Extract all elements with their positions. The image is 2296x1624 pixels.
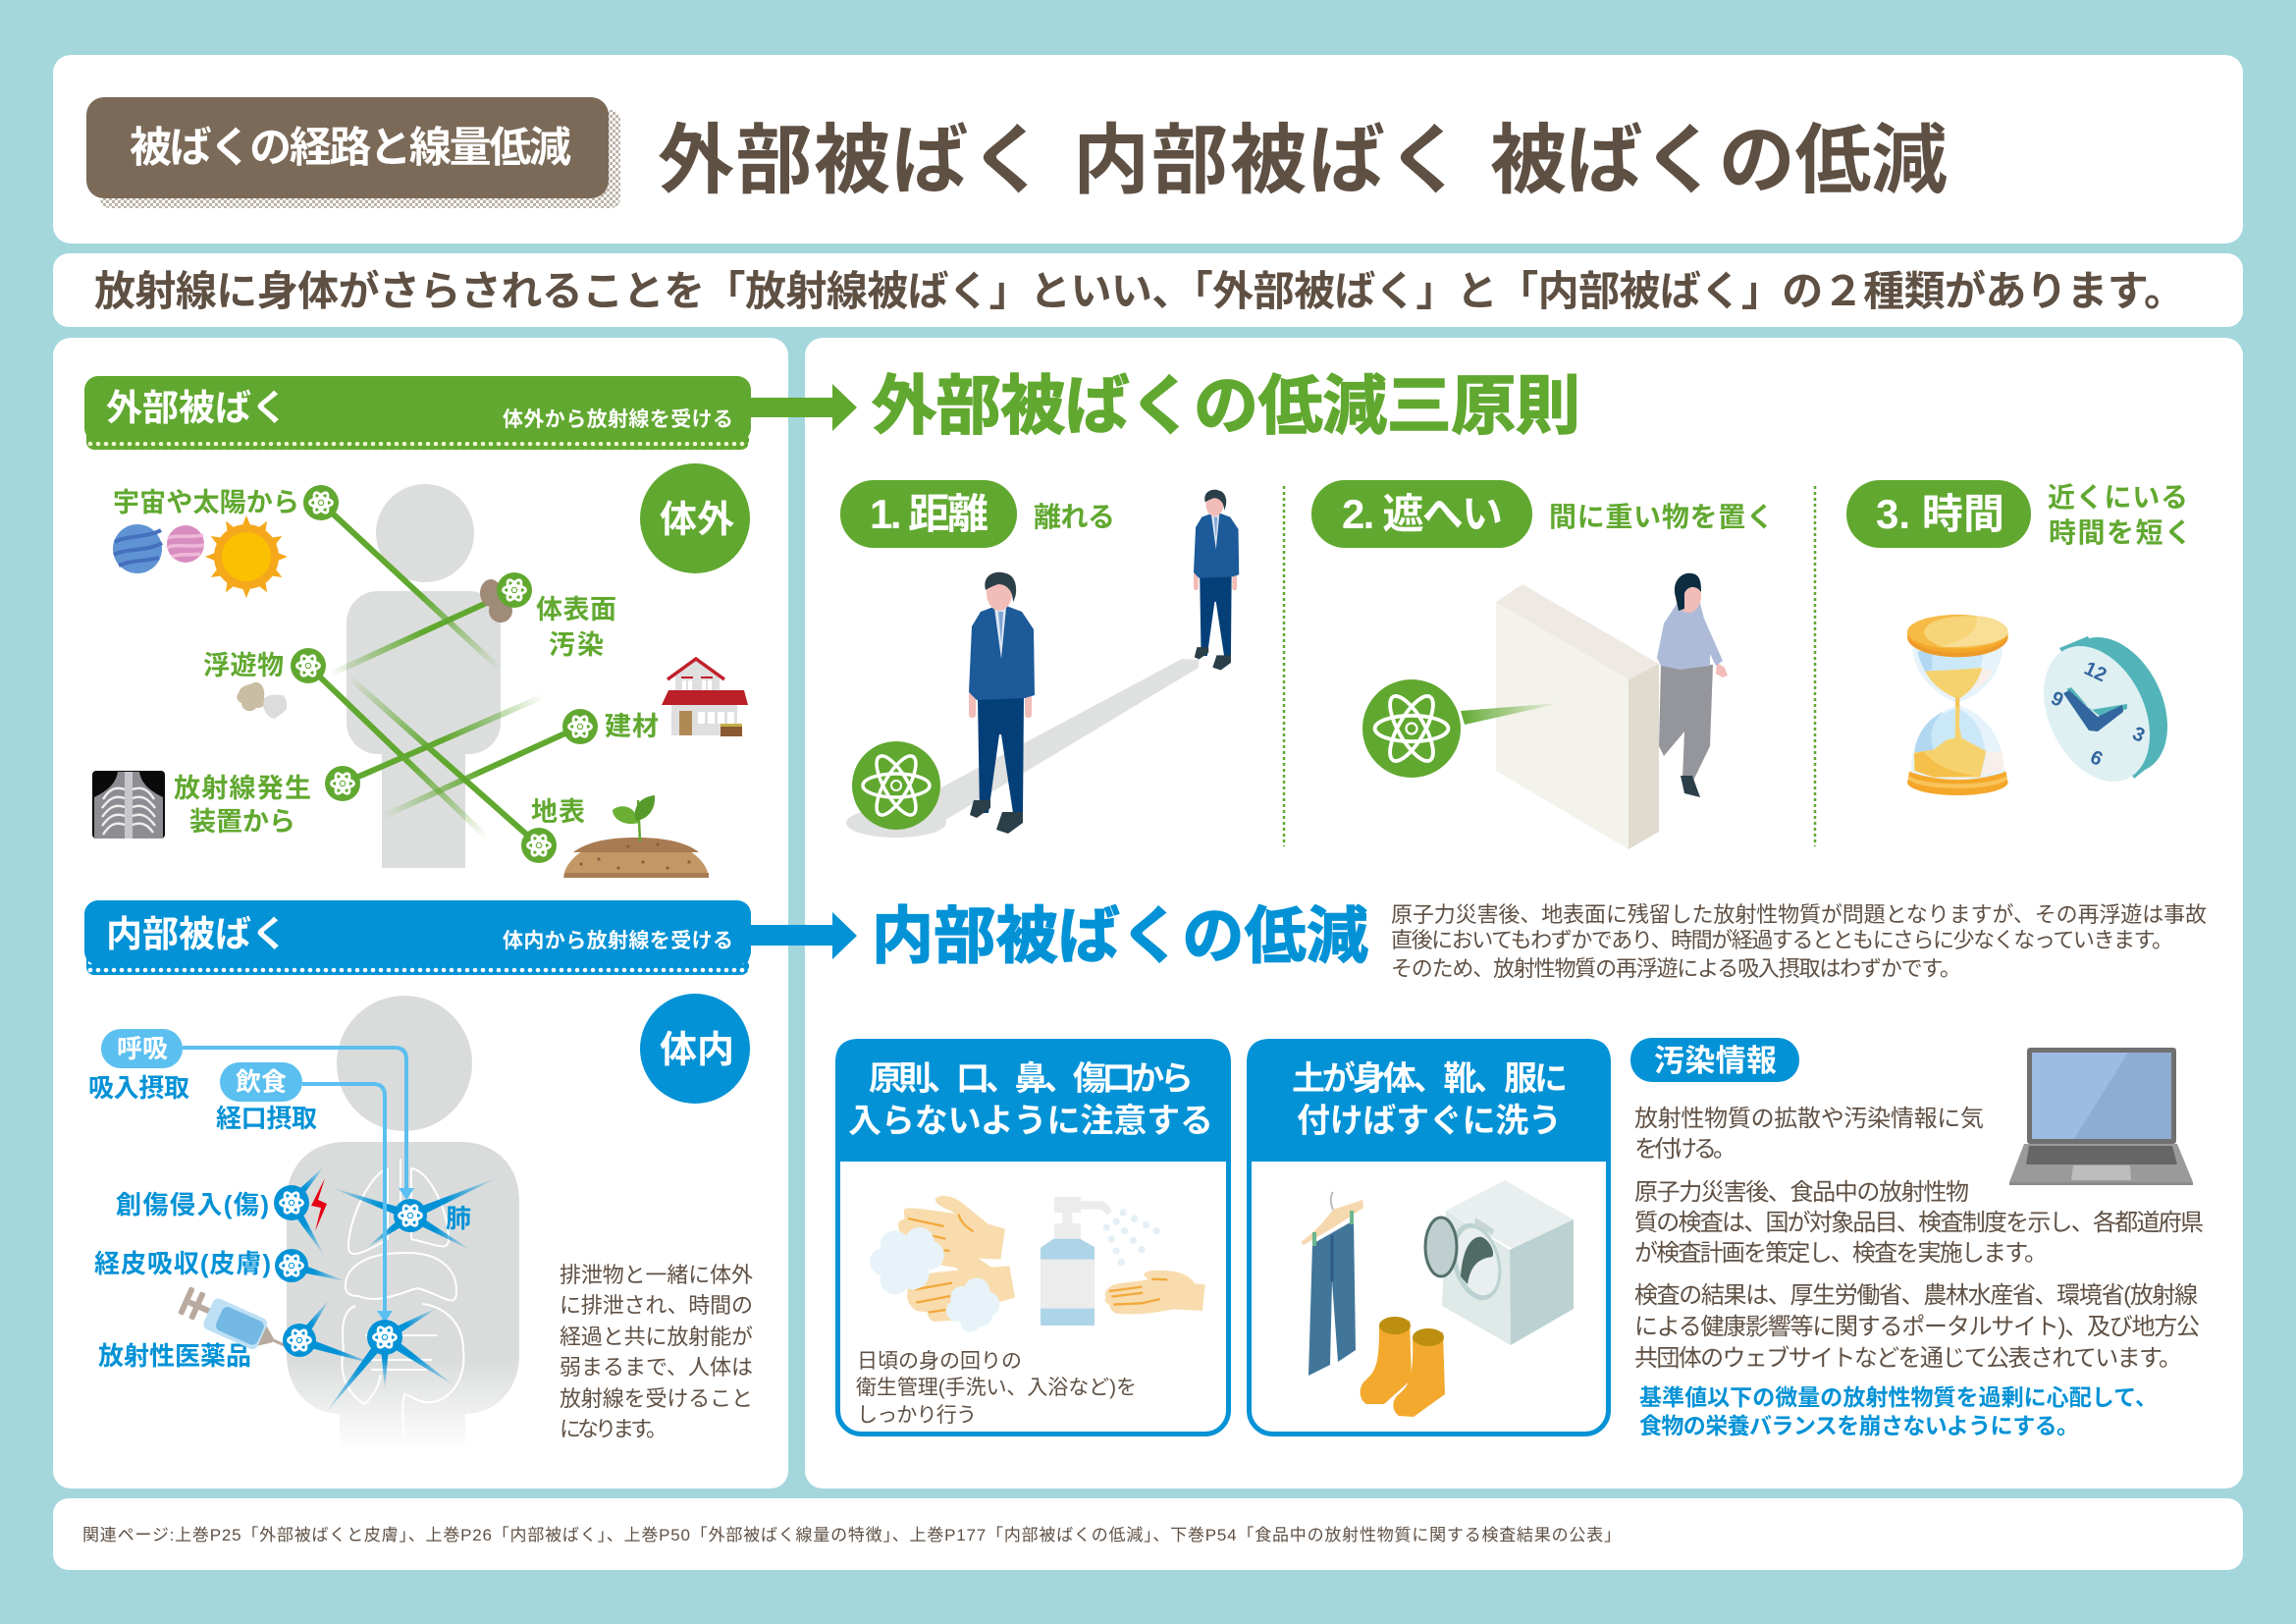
pill: eating: 飲食	[236, 1067, 287, 1097]
text block: excretion note: に排泄され、時間の	[560, 1293, 753, 1318]
heading band: external exposure	[84, 376, 751, 450]
icon: surface contamination	[480, 579, 512, 623]
panel: exposure pathways	[53, 338, 788, 1489]
icon: clock: 3	[2129, 723, 2148, 747]
label: building materials: 建材	[605, 712, 659, 741]
footer: related pages: 関連ページ:上巻P25「外部被ばくと皮膚」、上巻P26「内部被ばく」、上巻P50「外部被ばく線量の特徴」、上巻P177「内部被ばくの低減」、下巻P54「食品中の放射性物質に関する検査結果の公表」	[82, 1526, 1621, 1544]
pill: distance: 1. 距離	[870, 491, 988, 537]
label: place heavy object: 間に重い物を置く	[1549, 502, 1774, 532]
pill: distance	[840, 480, 1017, 548]
silhouette: internal body	[287, 996, 519, 1451]
label: lung: 肺	[446, 1204, 471, 1233]
route lines: breathing and eating	[183, 1048, 406, 1311]
internal rays	[288, 1165, 499, 1414]
illustration: distance	[846, 490, 1239, 838]
label: keep away: 離れる	[1034, 502, 1115, 532]
divider	[1283, 486, 1285, 846]
text: nutrition advice	[1639, 1384, 2158, 1438]
intro panel	[53, 253, 2243, 327]
card: wash off soil	[1247, 1039, 1611, 1434]
text block: contamination info: 検査の結果は、厚生労働省、農林水産省、環境省(放射線	[1634, 1282, 2198, 1309]
title tag: 被ばくの経路と線量低減	[130, 125, 571, 172]
icon: sanitizer bottle	[1041, 1197, 1160, 1326]
text: hygiene note: 日頃の身の回りの	[857, 1350, 1022, 1373]
text block: excretion note: 経過と共に放射能が	[560, 1325, 753, 1349]
main title: 内部被ばく	[1073, 117, 1464, 203]
text: hygiene note: 衛生管理(手洗い、入浴など)を	[856, 1377, 1137, 1399]
text block: resuspension note: 原子力災害後、地表面に残留した放射性物質が問題となりますが、その再浮遊は事故	[1391, 902, 2207, 927]
card: avoid intake	[835, 1039, 1231, 1434]
label: shorten time nearby	[2048, 482, 2192, 548]
icon: clock: 12	[2081, 658, 2109, 686]
text block: resuspension note: 直後においてもわずかであり、時間が経過するとともにさらに少なくなっていきます。	[1391, 928, 2173, 952]
pill: breathing: 呼吸	[117, 1034, 168, 1063]
icon: laptop	[2009, 1048, 2193, 1185]
pill: eating	[220, 1062, 302, 1102]
label: wound entry: 創傷侵入(傷)	[116, 1190, 269, 1219]
icon: planets and sun	[113, 515, 288, 598]
pill: shielding	[1311, 480, 1532, 548]
text block: contamination info: 質の検査は、国が対象品目、検査制度を示し、各都道府県	[1634, 1210, 2204, 1236]
icon: wound lightning	[311, 1178, 327, 1231]
label: body surface contamination: 汚染	[549, 630, 604, 660]
label: ground: 地表	[531, 797, 585, 827]
route arrowheads	[377, 1188, 414, 1323]
label: ingestion: 経口摂取	[216, 1104, 317, 1133]
text block: contamination info	[1634, 1106, 2204, 1372]
icon: airborne dust	[237, 682, 287, 719]
pill: contamination info: 汚染情報	[1654, 1044, 1777, 1078]
badge: outside body: 体外	[660, 500, 734, 541]
pill: breathing	[101, 1029, 183, 1068]
card: avoid intake: 入らないように注意する	[848, 1103, 1213, 1140]
text block: excretion note: 放射線を受けること	[560, 1386, 753, 1411]
heading band: internal exposure	[84, 900, 751, 975]
badge: outside body	[640, 463, 750, 573]
text block: contamination info: 原子力災害後、食品中の放射性物	[1634, 1179, 1969, 1206]
label: skin absorption: 経皮吸収(皮膚)	[94, 1249, 271, 1278]
text block: excretion note: になります。	[560, 1417, 667, 1441]
pill: time: 3. 時間	[1876, 491, 2004, 537]
text block: excretion note: 弱まるまで、人体は	[560, 1355, 753, 1380]
heading band: internal exposure: 体内から放射線を受ける	[503, 930, 733, 952]
icon: washing hands	[870, 1196, 1015, 1332]
label: space and sun: 宇宙や太陽から	[113, 488, 299, 517]
heading: three principles: 外部被ばくの低減三原則	[872, 369, 1580, 442]
divider	[1814, 486, 1816, 846]
header panel	[53, 55, 2243, 244]
text block: resuspension note: そのため、放射性物質の再浮遊による吸入摂取はわずかです。	[1391, 956, 1961, 981]
label: body surface contamination: 体表面	[536, 595, 616, 624]
text block: contamination info: が検査計画を策定し、検査を実施します。	[1634, 1240, 2048, 1267]
icon: hourglass	[1907, 615, 2008, 795]
atom markers: internal sources	[274, 1185, 427, 1357]
icon: clock: 9	[2048, 687, 2066, 712]
title tag	[86, 97, 620, 208]
pill: time	[1846, 480, 2031, 548]
text: nutrition advice: 基準値以下の微量の放射性物質を過剰に心配して、	[1639, 1384, 2158, 1410]
badge: inside body	[640, 994, 750, 1104]
text: hygiene note	[856, 1350, 1137, 1427]
icon: boots	[1361, 1317, 1445, 1417]
silhouette: external body	[347, 484, 501, 868]
icon: washing machine	[1425, 1180, 1574, 1345]
text: hygiene note: しっかり行う	[857, 1404, 977, 1427]
icon: soil and sprout	[563, 795, 709, 878]
footer: related pages	[53, 1498, 2243, 1570]
card: wash off soil: 付けばすぐに洗う	[1297, 1103, 1562, 1140]
external rays	[308, 503, 580, 845]
label: radiation generators: 装置から	[189, 807, 295, 837]
label: shorten time nearby: 時間を短く	[2049, 517, 2192, 548]
main title: 被ばくの低減	[1490, 117, 1948, 203]
icon: house	[662, 659, 748, 736]
label: body surface contamination	[536, 595, 616, 660]
label: airborne matter: 浮遊物	[203, 651, 284, 680]
text block: excretion note: 排泄物と一緒に体外	[560, 1263, 753, 1287]
text block: contamination info: 共団体のウェブサイトなどを通じて公表されています。	[1634, 1345, 2182, 1372]
organs outline	[342, 1159, 463, 1438]
heading: internal reduction: 内部被ばくの低減	[872, 902, 1368, 971]
main title	[658, 117, 1948, 203]
heading band: external exposure: 体外から放射線を受ける	[503, 408, 733, 431]
heading band: external exposure: 外部被ばく	[106, 388, 288, 428]
text block: contamination info: 放射性物質の拡散や汚染情報に気	[1634, 1106, 1984, 1132]
arrow: external to principles	[751, 384, 857, 431]
icon: chest x-ray	[92, 771, 165, 839]
text block: contamination info: による健康影響等に関するポータルサイト)、及び地方公	[1634, 1314, 2200, 1340]
intro panel: 放射線に身体がさらされることを「放射線被ばく」といい、「外部被ばく」と「内部被ばく」の２種類があります。	[94, 268, 2185, 314]
panel: reduction principles	[751, 338, 2243, 1489]
label: inhalation: 吸入摂取	[88, 1073, 189, 1103]
heading band: internal exposure: 内部被ばく	[106, 914, 288, 954]
card: wash off soil: 土が身体、靴、服に	[1292, 1059, 1568, 1098]
label: radiation generators: 放射線発生	[174, 774, 311, 803]
main title: 外部被ばく	[658, 117, 1046, 203]
text block: contamination info: を付ける。	[1634, 1136, 1736, 1163]
woman	[1657, 573, 1728, 797]
pill: contamination info	[1630, 1038, 1799, 1082]
icon: clock	[2022, 620, 2189, 799]
icon: clock: 6	[2087, 746, 2106, 771]
arrow: internal to reduction	[751, 912, 857, 959]
text block: resuspension note	[1391, 902, 2207, 981]
icon: open hand	[1105, 1271, 1205, 1314]
text block: excretion note	[560, 1263, 753, 1441]
text: nutrition advice: 食物の栄養バランスを崩さないようにする。	[1639, 1413, 2079, 1438]
icon: jeans on hanger	[1301, 1192, 1363, 1376]
label: radiopharmaceuticals: 放射性医薬品	[98, 1341, 251, 1371]
icon: syringe	[177, 1285, 294, 1362]
label: radiation generators	[174, 774, 311, 837]
label: shorten time nearby: 近くにいる	[2048, 482, 2188, 513]
pill: shielding: 2. 遮へい	[1342, 491, 1503, 537]
illustration: shielding	[1362, 573, 1728, 849]
atom markers: external sources	[291, 485, 598, 863]
card: avoid intake: 原則、口、鼻、傷口から	[869, 1060, 1194, 1098]
badge: inside body: 体内	[660, 1030, 734, 1071]
